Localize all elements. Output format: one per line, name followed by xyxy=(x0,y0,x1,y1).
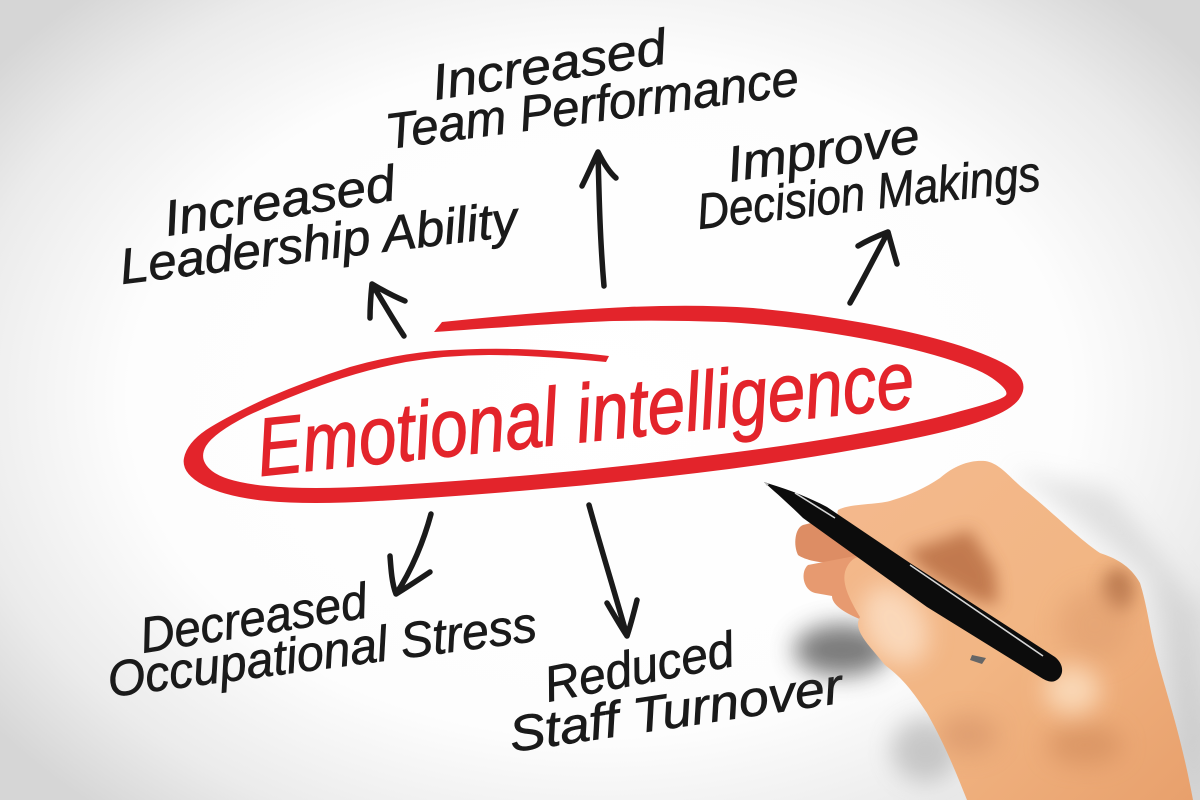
icon: pen xyxy=(764,482,1062,682)
label: Reduced Staff Turnover: Reduced xyxy=(539,621,741,713)
arrow: to team performance xyxy=(582,152,616,286)
label: Increased Leadership Ability: Leadership Ability xyxy=(117,190,523,295)
hand shading xyxy=(848,530,1134,765)
arrow: to occupational stress xyxy=(390,514,431,594)
label: Improve Decision Makings: Decision Makings xyxy=(694,145,1043,240)
label: Increased Leadership Ability: Increased xyxy=(160,155,401,247)
arrow: to leadership xyxy=(370,284,405,336)
label: Improve Decision Makings: Improve xyxy=(723,107,923,193)
label: Decreased Occupational Stress: Decreased xyxy=(136,572,373,664)
arrow: to staff turnover xyxy=(589,505,637,636)
label: Decreased Occupational Stress: Occupational Stress xyxy=(104,596,540,708)
label: Reduced Staff Turnover xyxy=(505,621,848,763)
hand body xyxy=(837,461,1193,800)
back fingers xyxy=(795,522,870,563)
label: Increased Team Performance: Increased xyxy=(428,18,672,111)
label: Increased Team Performance: Team Performance xyxy=(382,50,802,160)
hand shadows xyxy=(794,470,1200,800)
icon: hand xyxy=(795,461,1193,800)
label: Improve Decision Makings xyxy=(694,107,1043,240)
title: Emotional intelligence: Emotional intelligence xyxy=(252,334,918,494)
red ellipse stroke xyxy=(184,306,1023,503)
label: Reduced Staff Turnover: Staff Turnover xyxy=(505,657,848,763)
gap between fingers xyxy=(970,655,986,664)
arrow: to decision making xyxy=(850,232,897,303)
